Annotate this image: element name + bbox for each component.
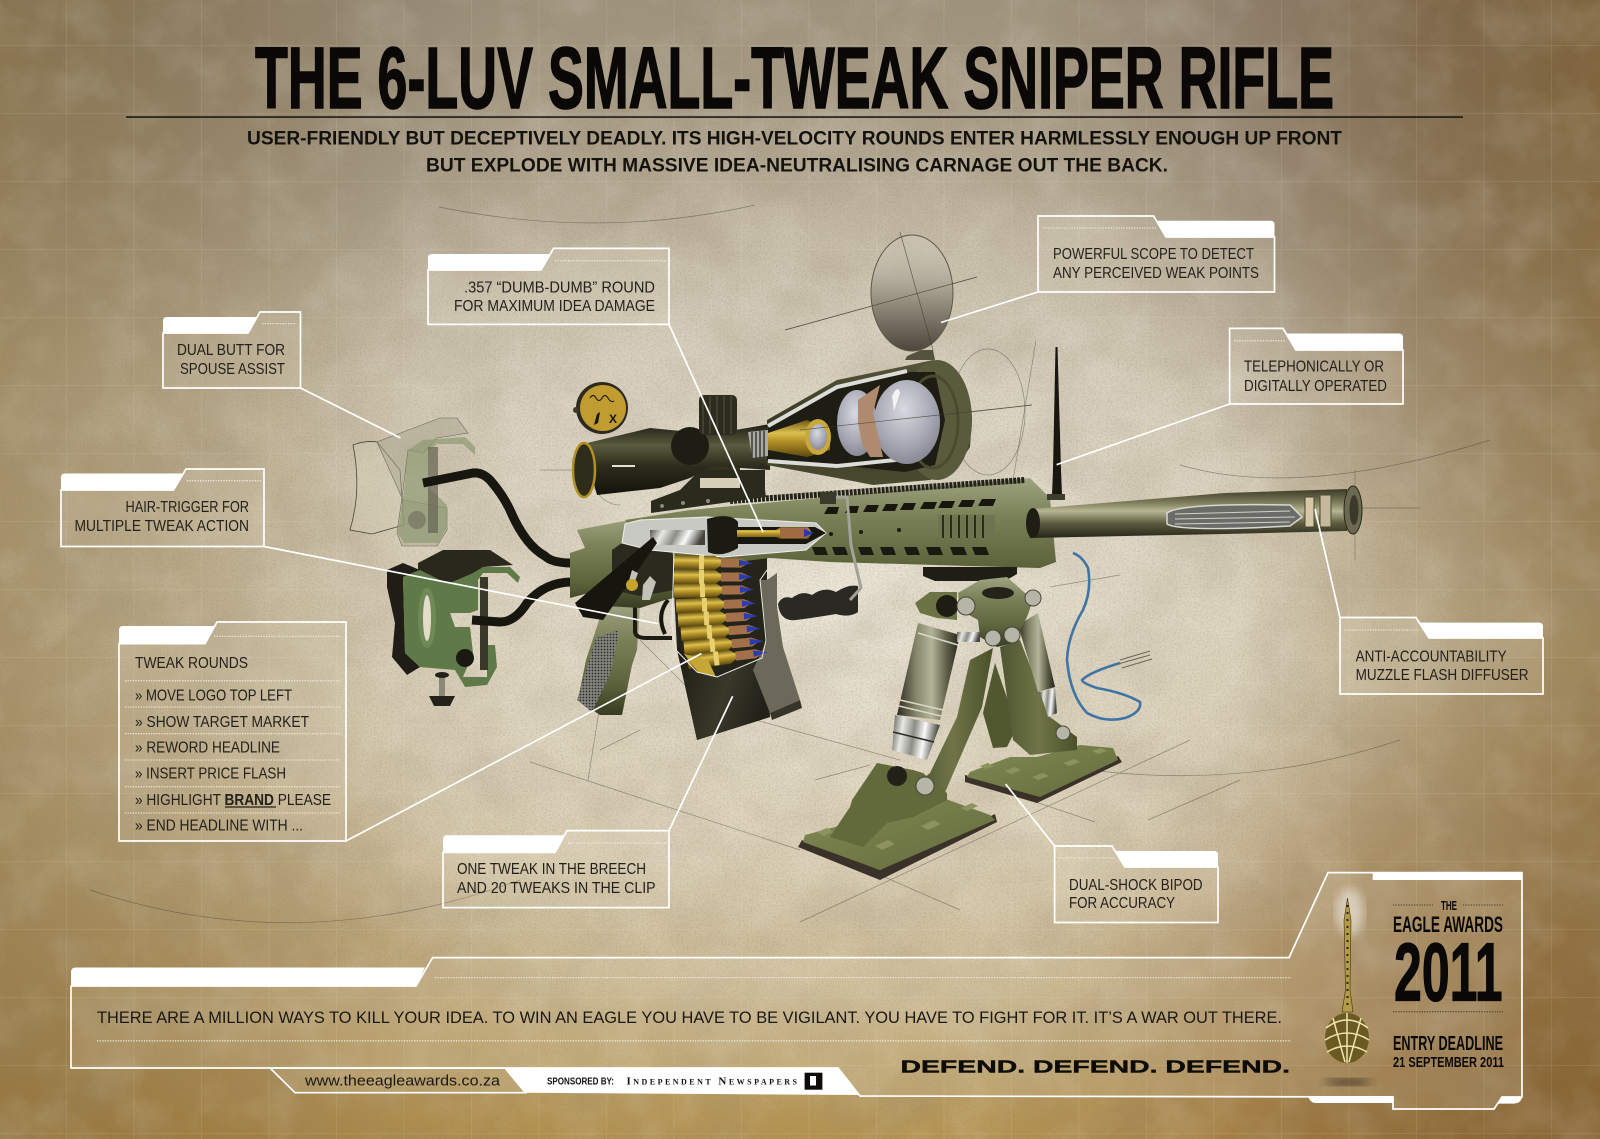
callout: hair-trigger [61, 469, 264, 546]
upper left clevis [915, 592, 957, 620]
callout: telephonically operated: TELEPHONICALLY OR [1244, 359, 1384, 376]
callout: telephonically operated [1230, 328, 1403, 404]
title rule [126, 116, 1463, 118]
clip cutaway edge [672, 550, 767, 677]
rifle illustration [350, 232, 1362, 880]
rear leg [1000, 640, 1077, 755]
awards wordmark: 2011 [1394, 926, 1503, 1018]
tweak rounds list [135, 688, 331, 835]
callout: dual-shock bipod: DUAL-SHOCK BIPOD [1069, 877, 1203, 894]
rear scope tube [573, 395, 770, 497]
callout: anti-accountability muzzle flash diffuser: MUZZLE FLASH DIFFUSER [1356, 667, 1529, 684]
callout: hair-trigger: MULTIPLE TWEAK ACTION [74, 518, 249, 535]
front leg [913, 648, 993, 817]
pistol grip [577, 600, 672, 715]
upper hub [958, 577, 1033, 647]
vent grill [938, 515, 995, 538]
chamber cutaway [622, 516, 826, 557]
slogan: DEFEND. DEFEND. DEFEND. [900, 1056, 1290, 1076]
tweak rounds list: » SHOW TARGET MARKET [135, 714, 309, 731]
awards wordmark [1393, 898, 1504, 1071]
sponsor strip: Independent Newspapers [626, 1076, 798, 1088]
chrome pin [957, 632, 980, 642]
tweak rounds list: » REWORD HEADLINE [135, 740, 280, 757]
construction sketch lines [90, 205, 1490, 923]
callout: powerful scope: ANY PERCEIVED WEAK POINTS [1053, 265, 1259, 282]
callout: anti-accountability muzzle flash diffuser [1340, 618, 1543, 694]
antenna [1047, 347, 1065, 500]
fore-end body [625, 478, 1056, 600]
mechanism [612, 530, 675, 596]
tweak rounds list: » HIGHLIGHT BRAND PLEASE [135, 792, 331, 809]
lens flip cover [785, 232, 977, 360]
leader lines [264, 292, 1340, 846]
awards wordmark: THE [1441, 898, 1457, 913]
callout: dumb-dumb round: FOR MAXIMUM IDEA DAMAGE [454, 298, 655, 315]
ghost circle sketch [951, 349, 1025, 475]
awards wordmark: 21 SEPTEMBER 2011 [1393, 1054, 1504, 1071]
callout: dual butt: SPOUSE ASSIST [180, 361, 285, 378]
top rail [730, 480, 1025, 501]
tweak rounds list: » END HEADLINE WITH ... [135, 818, 303, 835]
cable plug sketch [1118, 651, 1152, 668]
callout: dual butt [163, 312, 300, 388]
panel: bottom message and awards [71, 872, 1522, 1109]
charging handle and mechanism parts [575, 537, 657, 620]
receiver lower [570, 518, 700, 608]
bipod mount plate [923, 567, 1017, 581]
ghost upper butt stock [350, 418, 475, 546]
callout: powerful scope: POWERFUL SCOPE TO DETECT [1053, 246, 1254, 263]
callout: dual-shock bipod [1055, 846, 1218, 922]
front scope bell cutaway [748, 360, 1032, 485]
lower stock tube [472, 582, 572, 622]
ocular gold flip cap [573, 382, 628, 434]
lower clevis [887, 766, 907, 786]
callout: telephonically operated: DIGITALLY OPERATED [1244, 378, 1387, 395]
left cylinder [897, 623, 960, 720]
lower butt stock [387, 550, 520, 706]
foregrip [778, 497, 861, 620]
sponsor strip [505, 1068, 860, 1095]
magazine [672, 550, 802, 740]
subtitle [247, 129, 1342, 177]
callout: powerful scope [1038, 216, 1274, 292]
website tab [270, 1068, 526, 1093]
upper slots [824, 499, 996, 514]
tweak rounds list: » INSERT PRICE FLASH [135, 766, 286, 783]
callout: one tweak in the breech: ONE TWEAK IN THE BREECH [457, 861, 646, 878]
callout: dumb-dumb round: .357 “DUMB-DUMB” ROUND [464, 280, 655, 297]
blue cable [1067, 553, 1140, 720]
upper stock tube [423, 473, 572, 563]
callout: one tweak in the breech [443, 831, 669, 908]
awards wordmark: ENTRY DEADLINE [1393, 1032, 1503, 1055]
ocular gold flip cap: X [609, 412, 617, 426]
callout: dumb-dumb round [428, 248, 669, 324]
callout: dual-shock bipod: FOR ACCURACY [1069, 895, 1175, 912]
bolts [916, 590, 1070, 795]
main message: THERE ARE A MILLION WAYS TO KILL YOUR IDEA. TO WIN AN EAGLE YOU HAVE TO BE VIGILANT. YOU HAVE TO FIGHT FOR IT. IT’S A WAR OUT THERE. [97, 1009, 1282, 1027]
tweak rounds heading: TWEAK ROUNDS [135, 655, 248, 672]
scope mount [651, 440, 766, 513]
awards wordmark: EAGLE AWARDS [1393, 912, 1503, 937]
callout: anti-accountability muzzle flash diffuser: ANTI-ACCOUNTABILITY [1356, 648, 1507, 666]
front foot bracket [830, 763, 947, 847]
callout: dual butt: DUAL BUTT FOR [177, 342, 285, 359]
chrome piston [892, 715, 940, 760]
rear foot [965, 745, 1122, 803]
callout: hair-trigger: HAIR-TRIGGER FOR [126, 499, 249, 516]
lower slots [812, 547, 989, 555]
subtitle: USER-FRIENDLY BUT DECEPTIVELY DEADLY. ITS HIGH-VELOCITY ROUNDS ENTER HARMLESSLY ENOUGH UP FRONT [247, 129, 1342, 150]
bipod [798, 567, 1122, 880]
rail clamp [820, 492, 836, 504]
right piston [1040, 688, 1057, 717]
body holes [829, 528, 901, 536]
panel: tweak rounds [119, 622, 346, 841]
barrel [1026, 486, 1362, 538]
trophy [1324, 888, 1372, 1086]
website tab: www.theeagleawards.co.za [304, 1072, 501, 1089]
right cylinder [1018, 613, 1055, 692]
middle back panel [983, 663, 1017, 748]
subtitle: BUT EXPLODE WITH MASSIVE IDEA-NEUTRALISING CARNAGE OUT THE BACK. [426, 156, 1168, 177]
sponsor strip: SPONSORED BY: [547, 1076, 614, 1088]
tweak rounds list: » MOVE LOGO TOP LEFT [135, 688, 292, 705]
front foot [798, 798, 997, 880]
callout: one tweak in the breech: AND 20 TWEAKS IN THE CLIP [457, 880, 656, 897]
rounds in clip [672, 550, 768, 677]
